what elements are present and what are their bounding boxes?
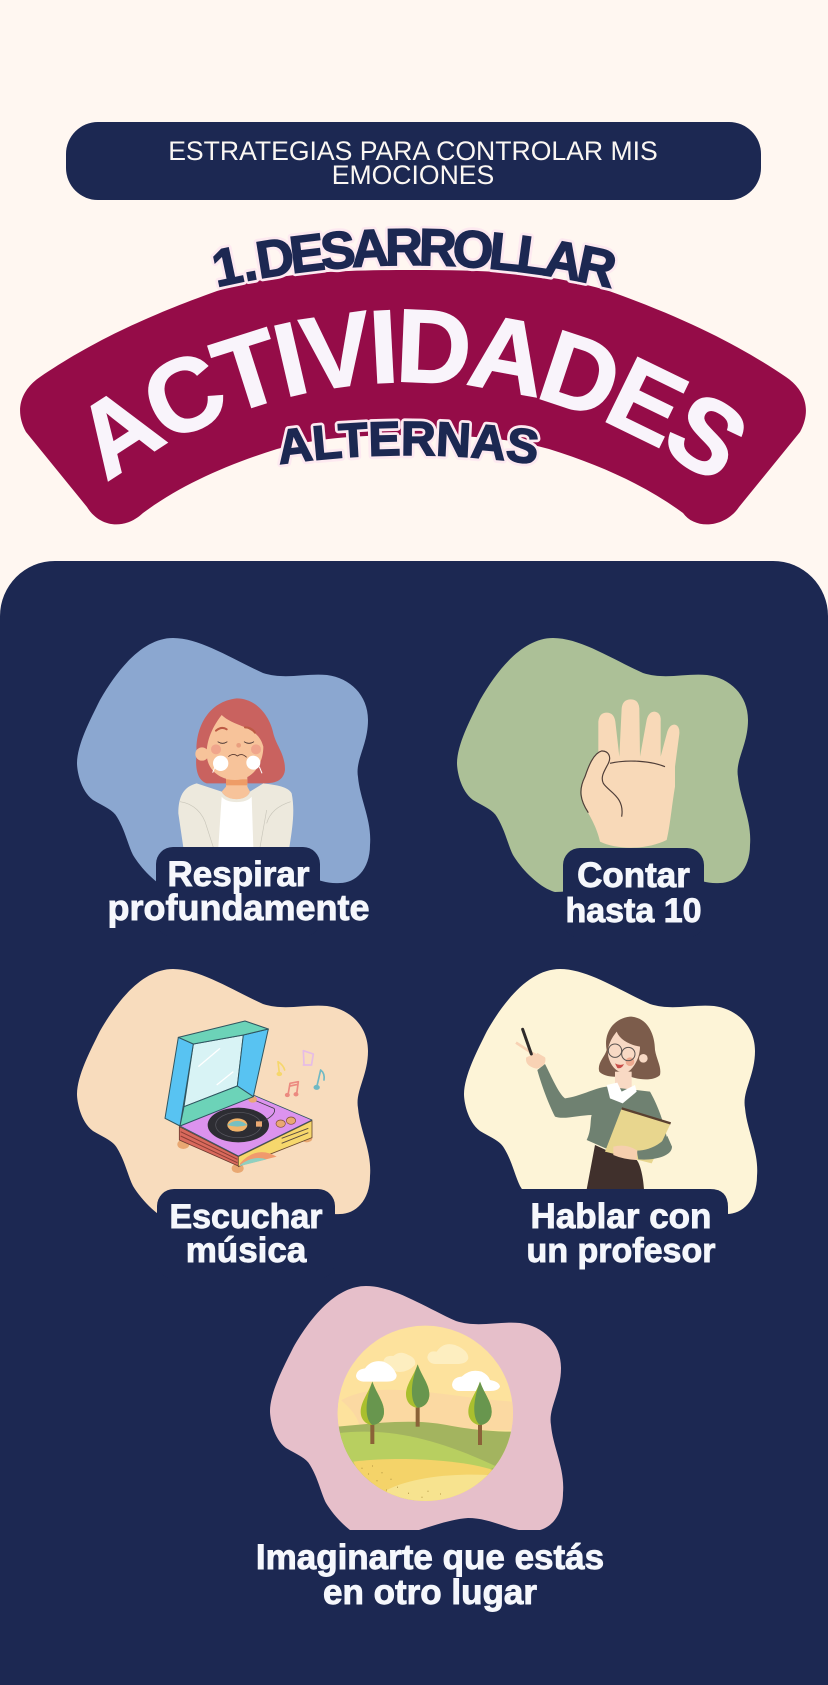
heading line 3: ALTERNAS: [277, 418, 540, 468]
heading main word: ACTIVIDADES: [90, 309, 744, 482]
card: profesor: [464, 969, 757, 1279]
label tab: [563, 848, 704, 938]
label: un profesor: [527, 1232, 715, 1270]
label: en otro lugar: [323, 1573, 537, 1612]
label tab: [240, 1530, 610, 1620]
label: [107, 855, 370, 928]
label: Contar: [577, 856, 690, 895]
heading line 1: 1.DESARROLLAR: [210, 226, 618, 292]
label tab: [157, 1189, 335, 1279]
header pill: EMOCIONES: [332, 160, 494, 190]
heading line 3: ALTERNAS: [280, 421, 538, 465]
card: contar: [457, 638, 750, 938]
label: hasta 10: [565, 892, 702, 930]
trees: [361, 1364, 492, 1445]
card: imaginar: [240, 1286, 610, 1620]
label: profundamente: [107, 887, 370, 928]
label: Imaginarte que estás: [256, 1538, 604, 1577]
illustration: hand: [581, 699, 679, 848]
blob: [457, 638, 750, 892]
label tab: [512, 1189, 728, 1279]
illustration: woman breathing: [178, 698, 293, 847]
blob: [77, 969, 370, 1223]
title banner: [20, 226, 806, 524]
label: [169, 1198, 323, 1270]
white clouds: [356, 1361, 500, 1391]
label: [527, 1197, 715, 1270]
heading line 1: 1.DESARROLLAR: [213, 228, 616, 289]
header pill: ESTRATEGIAS PARA CONTROLAR MIS: [168, 136, 658, 166]
banner shape: [20, 270, 806, 524]
card: musica: [77, 969, 370, 1279]
label: [256, 1538, 604, 1612]
illustration: teacher: [516, 1017, 672, 1189]
blob: [464, 969, 757, 1223]
label tab: [156, 847, 320, 937]
header pill: [66, 122, 761, 200]
label: música: [186, 1231, 307, 1270]
card: respirar: [77, 638, 370, 937]
music notes: [277, 1051, 324, 1096]
blob: [77, 638, 370, 892]
blob: [270, 1286, 563, 1540]
illustration: landscape: [337, 1325, 513, 1503]
faint clouds: [383, 1344, 468, 1372]
label: Escuchar: [169, 1198, 323, 1236]
illustration: record player: [165, 1021, 324, 1173]
label: Respirar: [167, 855, 310, 894]
label: Hablar con: [531, 1197, 711, 1236]
label: [565, 856, 702, 930]
navy panel: [0, 561, 828, 1685]
